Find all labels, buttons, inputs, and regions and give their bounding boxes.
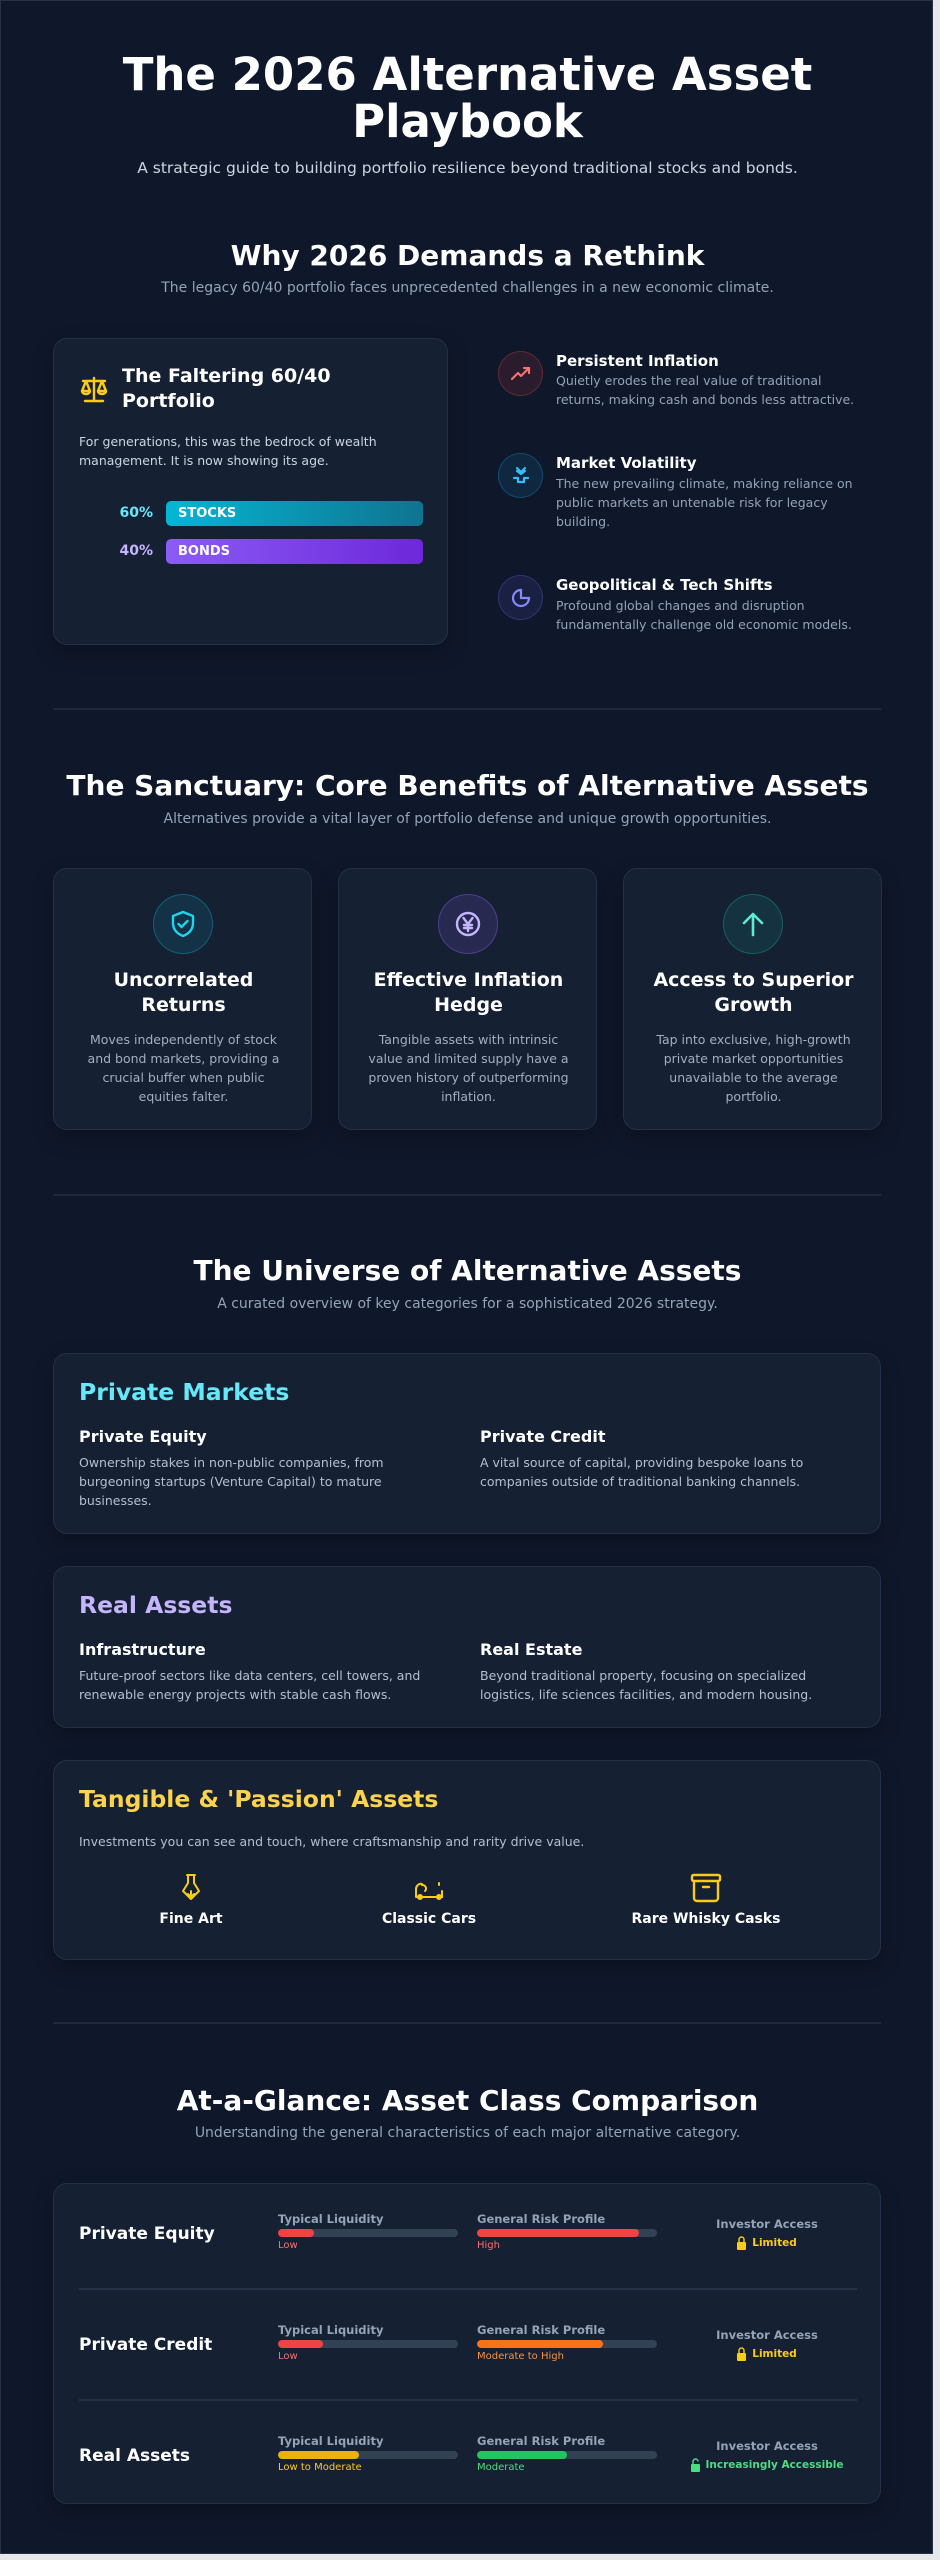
icon: car	[415, 1882, 443, 1900]
subheading: universe: A curated overview of key categories for a sophisticated 2026 strategy.	[217, 1296, 718, 1312]
row: private equity: High	[477, 2240, 500, 2251]
item: real estate: Beyond traditional property, focusing on specialized logistics, life sciences facilities, and modern housing.	[480, 1668, 812, 1702]
bar: stocks: 60%	[119, 505, 153, 521]
item: private equity: Private Equity	[79, 1427, 207, 1446]
item: geopolitical: Geopolitical & Tech Shifts	[556, 576, 773, 594]
subtitle: A strategic guide to building portfolio resilience beyond traditional stocks and bonds.	[137, 159, 798, 177]
bar: stocks	[119, 501, 423, 526]
item: whisky casks	[631, 1874, 781, 1927]
row: private credit: Private Credit	[79, 2335, 212, 2355]
row: real assets: Real Assets	[79, 2446, 190, 2466]
row: private equity: Private Equity	[79, 2224, 215, 2244]
item: private equity: Ownership stakes in non-public companies, from burgeoning startups (Venture Capital) to mature businesses.	[79, 1455, 384, 1508]
subheading: comparison: Understanding the general characteristics of each major alternative category.	[195, 2125, 740, 2141]
icon: trend up	[498, 351, 543, 396]
item: fine art: Fine Art	[159, 1911, 223, 1927]
panel: uncorrelated returns	[53, 868, 312, 1130]
row: real assets: General Risk Profile	[477, 2434, 605, 2448]
item: whisky casks: Rare Whisky Casks	[631, 1911, 781, 1927]
panel: real assets: Real Assets	[79, 1591, 232, 1619]
row: real assets: Increasingly Accessible	[706, 2459, 843, 2471]
row: private equity: Limited	[752, 2237, 797, 2249]
panel: private markets	[53, 1353, 881, 1534]
icon: pen nib	[182, 1874, 200, 1900]
panel title	[122, 365, 331, 412]
panel text: For generations, this was the bedrock of wealth management. It is now showing its age.	[79, 434, 377, 468]
item: private credit	[480, 1427, 803, 1489]
row: private equity	[79, 2212, 818, 2251]
row: private credit: General Risk Profile	[477, 2323, 605, 2337]
panel: superior growth: Access to Superior	[653, 969, 854, 991]
row: private equity: Investor Access	[716, 2217, 818, 2231]
bar: stocks: STOCKS	[178, 506, 236, 521]
row: private credit: Low	[278, 2351, 298, 2362]
panel title: Portfolio	[122, 390, 215, 412]
row: real assets: Low to Moderate	[278, 2462, 362, 2473]
item: infrastructure	[79, 1640, 420, 1702]
panel: inflation hedge	[338, 868, 597, 1130]
icon: arrow up	[723, 894, 783, 954]
row: real assets	[79, 2434, 843, 2473]
panel: tangible assets: Tangible & 'Passion' Assets	[79, 1785, 438, 1813]
title: Playbook	[352, 95, 583, 148]
panel: comparison table	[53, 2183, 881, 2504]
panel: superior growth: Tap into exclusive, high-growth private market opportunities unavailable to the average portfolio.	[656, 1032, 851, 1104]
row: real assets: Typical Liquidity	[278, 2434, 383, 2448]
item: persistent inflation	[498, 351, 854, 407]
item: real estate: Real Estate	[480, 1640, 582, 1659]
icon: scales	[80, 376, 108, 402]
row: private credit: Investor Access	[716, 2328, 818, 2342]
item: infrastructure: Future-proof sectors like data centers, cell towers, and renewable energy projects with stable cash flows.	[79, 1668, 420, 1702]
item: private credit: A vital source of capital, providing bespoke loans to companies outside of traditional banking channels.	[480, 1455, 803, 1489]
icon: volatility	[498, 453, 543, 498]
title: The 2026 Alternative Asset	[123, 48, 812, 101]
item: classic cars	[382, 1882, 476, 1927]
item: classic cars: Classic Cars	[382, 1911, 476, 1927]
heading: comparison: At-a-Glance: Asset Class Comparison	[177, 2084, 758, 2117]
icon: globe	[498, 575, 543, 620]
item: private credit: Private Credit	[480, 1427, 605, 1446]
icon: yen coin	[438, 894, 498, 954]
item: market volatility: The new prevailing climate, making reliance on public markets an untenable risk for legacy building.	[556, 476, 853, 529]
item: real estate	[480, 1640, 812, 1702]
item: geopolitical	[498, 575, 852, 632]
subheading: why 2026: The legacy 60/40 portfolio faces unprecedented challenges in a new economic climate.	[161, 280, 774, 296]
panel: superior growth	[623, 868, 882, 1130]
row: private equity: Low	[278, 2240, 298, 2251]
item: persistent inflation: Quietly erodes the real value of traditional returns, making cash and bonds less attractive.	[556, 373, 854, 407]
panel: inflation hedge: Hedge	[434, 994, 503, 1016]
item: market volatility: Market Volatility	[556, 454, 696, 472]
title	[122, 48, 812, 148]
panel: private markets: Private Markets	[79, 1378, 289, 1406]
heading: universe: The Universe of Alternative Assets	[194, 1254, 741, 1287]
icon: cask	[690, 1874, 722, 1902]
bar: bonds: 40%	[119, 543, 153, 559]
row: private credit: Limited	[752, 2348, 797, 2360]
panel: uncorrelated returns: Moves independently of stock and bond markets, providing a crucial buffer when public equities falter.	[88, 1032, 279, 1104]
panel: inflation hedge: Effective Inflation	[374, 969, 563, 991]
item: fine art	[159, 1874, 223, 1927]
item: market volatility	[498, 453, 853, 529]
row: real assets: Moderate	[477, 2462, 525, 2473]
panel: superior growth: Growth	[714, 994, 793, 1016]
row: private credit: Moderate to High	[477, 2351, 564, 2362]
panel: inflation hedge: Tangible assets with intrinsic value and limited supply have a proven history of outperforming inflation.	[368, 1032, 569, 1104]
row: real assets: Investor Access	[716, 2439, 818, 2453]
panel: uncorrelated returns: Returns	[141, 994, 226, 1016]
panel title: The Faltering 60/40	[122, 365, 331, 387]
panel: real assets	[53, 1566, 881, 1728]
panel: faltering 60/40	[53, 338, 448, 645]
panel: tangible assets	[53, 1760, 881, 1960]
bar: bonds: BONDS	[178, 544, 230, 559]
item: private equity	[79, 1427, 384, 1508]
row: private credit: Typical Liquidity	[278, 2323, 383, 2337]
panel: uncorrelated returns: Uncorrelated	[114, 969, 253, 991]
bar: bonds	[119, 539, 423, 564]
icon: shield	[153, 894, 213, 954]
panel: tangible assets: Investments you can see and touch, where craftsmanship and rarity drive value.	[79, 1834, 584, 1849]
row: private equity: General Risk Profile	[477, 2212, 605, 2226]
row: private equity: Typical Liquidity	[278, 2212, 383, 2226]
heading: why 2026: Why 2026 Demands a Rethink	[231, 239, 704, 272]
item: persistent inflation: Persistent Inflation	[556, 352, 719, 370]
subheading: sanctuary: Alternatives provide a vital layer of portfolio defense and unique growth opportunities.	[164, 811, 771, 827]
heading: sanctuary: The Sanctuary: Core Benefits of Alternative Assets	[66, 769, 869, 802]
item: infrastructure: Infrastructure	[79, 1640, 206, 1659]
row: private credit	[79, 2323, 818, 2362]
item: geopolitical: Profound global changes and disruption fundamentally challenge old economic models.	[556, 598, 852, 632]
